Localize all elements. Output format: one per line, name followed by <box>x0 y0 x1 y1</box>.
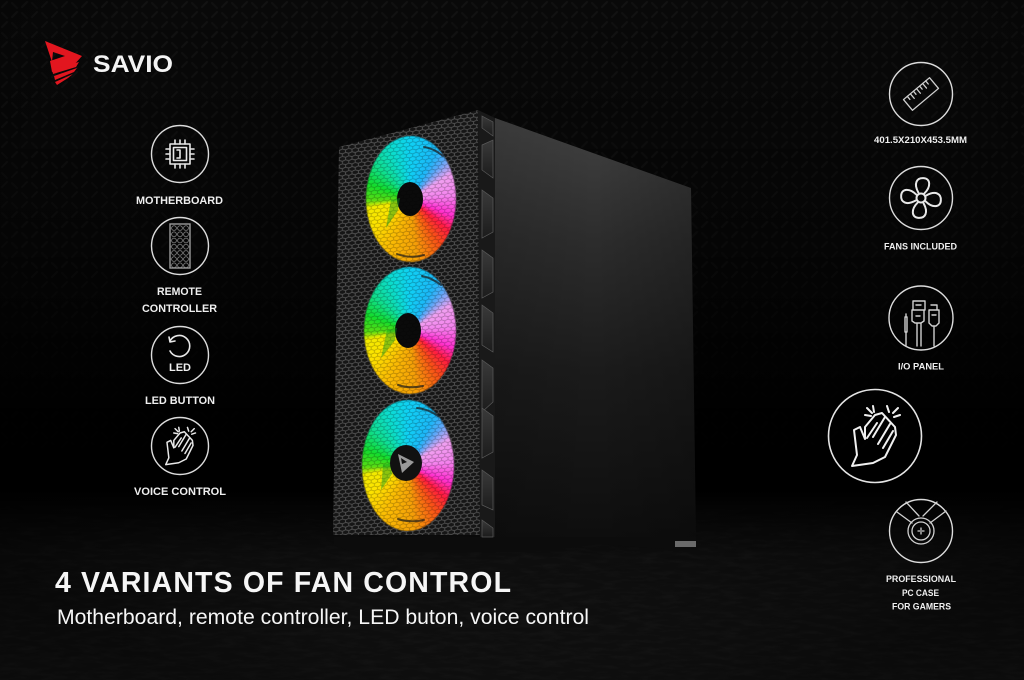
label: LED button: LED BUTTON <box>145 395 215 407</box>
icon: LED button <box>150 326 210 384</box>
case body <box>333 110 696 547</box>
icon: fan <box>888 166 954 230</box>
label: remote controller: CONTROLLER <box>142 303 217 315</box>
fan 2 <box>364 267 456 394</box>
label: professional PC case for gamers: FOR GAMERS <box>892 602 951 612</box>
label: voice control: VOICE CONTROL <box>134 486 226 498</box>
icon: motherboard chip <box>150 124 210 184</box>
label: remote controller <box>142 286 217 315</box>
icon: remote controller <box>150 216 210 276</box>
label: professional PC case for gamers: PC CASE <box>902 588 939 599</box>
label: professional PC case for gamers: PROFESSIONAL <box>886 574 956 585</box>
label: remote controller: REMOTE <box>157 286 202 298</box>
fan 1 hub <box>397 182 423 216</box>
fan 1 <box>366 136 456 262</box>
product: PC case with RGB fans <box>333 110 696 547</box>
mesh and front pillar <box>333 110 495 538</box>
label: motherboard: MOTHERBOARD <box>136 195 223 207</box>
label: dimensions: 401.5X210X453.5MM <box>874 135 967 146</box>
icon: I/O panel connectors <box>888 285 954 351</box>
logo: SAVIO <box>45 41 173 85</box>
icon: ruler dimensions <box>888 62 954 126</box>
label: I/O panel: I/O PANEL <box>898 362 944 372</box>
subtitle: control list: Motherboard, remote controller, LED buton, voice control <box>57 606 589 629</box>
icon: LED button: LED <box>169 362 191 374</box>
fan 3 hub with logo <box>390 445 422 481</box>
brand name: SAVIO <box>93 51 173 78</box>
icon: large voice control clap <box>828 388 922 484</box>
icon: voice control clap <box>150 416 210 476</box>
label: fans included: FANS INCLUDED <box>884 242 957 252</box>
label: professional PC case for gamers <box>886 574 956 612</box>
icon: red arrow mark <box>45 41 82 85</box>
fan 2 hub <box>395 313 421 348</box>
fan 3 <box>362 400 454 531</box>
icon: medal professional case <box>888 498 954 564</box>
